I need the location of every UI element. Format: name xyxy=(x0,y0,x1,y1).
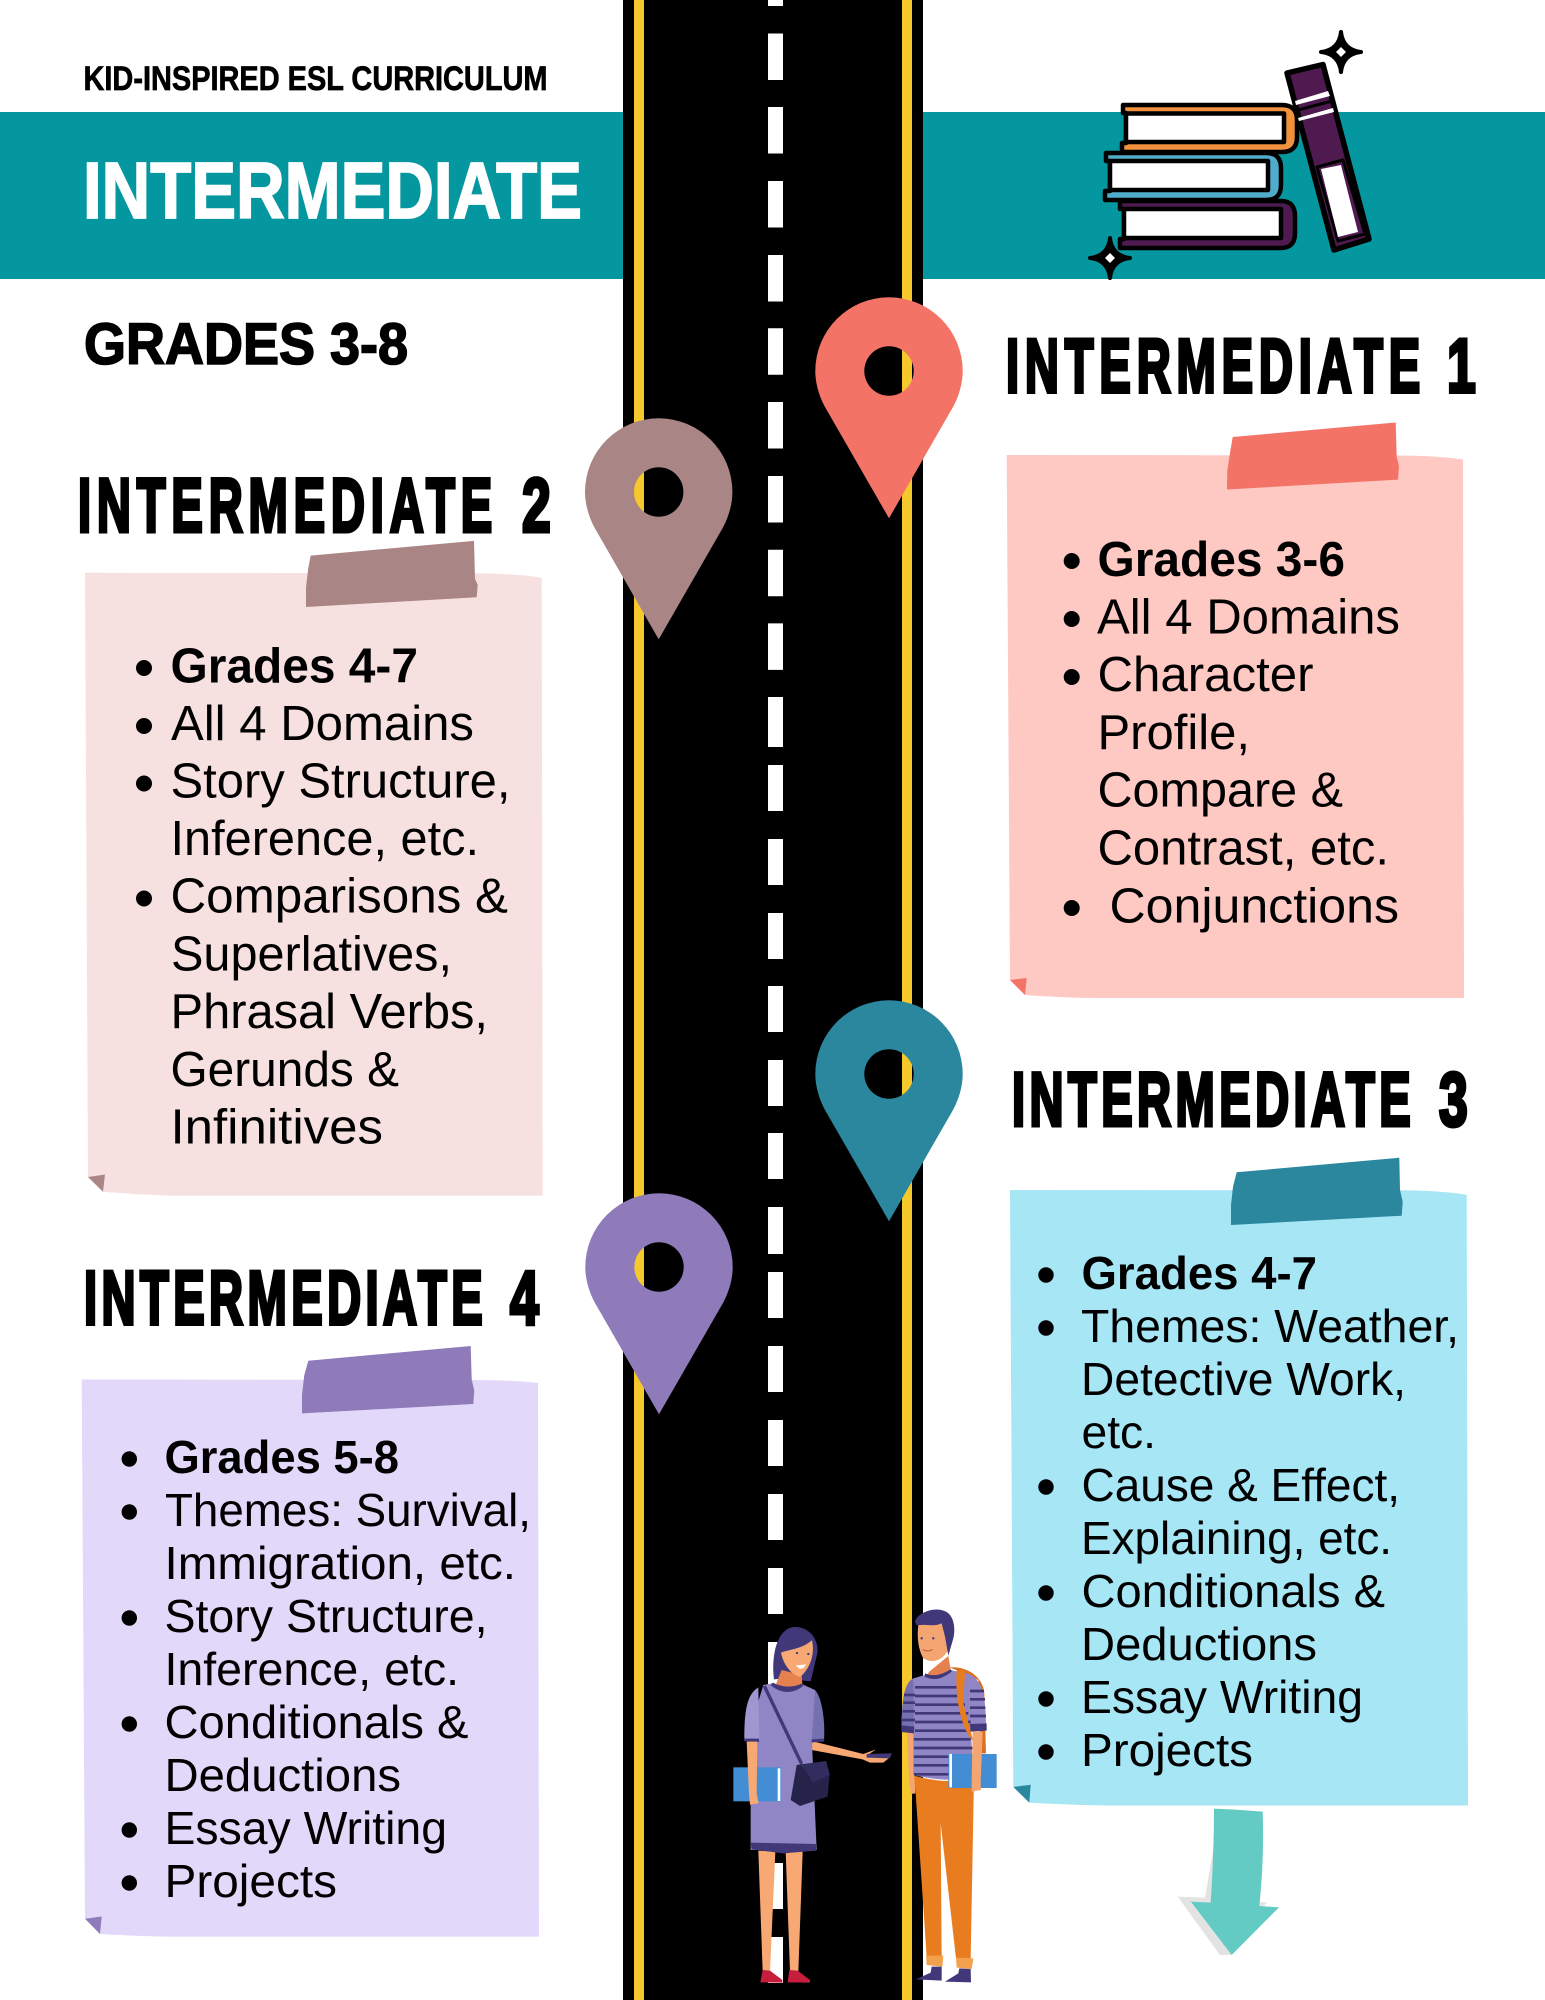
eyes and smile xyxy=(920,1637,923,1639)
arm left xyxy=(747,1742,759,1805)
book xyxy=(733,1767,781,1801)
bullet list: Essay Writing xyxy=(164,1802,447,1854)
arm right with phone xyxy=(812,1741,891,1763)
bullet list: Cause & Effect, xyxy=(1082,1459,1400,1511)
bullet list: Essay Writing xyxy=(1081,1671,1363,1723)
icon: leaning book xyxy=(1287,64,1369,250)
icon: sparkle bottom xyxy=(1090,238,1130,278)
trousers xyxy=(914,1775,974,1958)
heading: Intermediate 1: 1 xyxy=(1447,323,1476,408)
backpack strap back xyxy=(950,1667,986,1753)
bullet list: Grades 4-7 xyxy=(170,638,418,693)
bullet list: Story Structure, xyxy=(170,754,510,809)
road xyxy=(623,0,923,2000)
book xyxy=(948,1754,997,1788)
arm left xyxy=(907,1733,915,1794)
illustration: man with book xyxy=(901,1609,997,1982)
shoes xyxy=(760,1970,810,1983)
face xyxy=(781,1639,813,1677)
hair xyxy=(915,1609,954,1656)
fringe xyxy=(780,1633,813,1653)
face xyxy=(918,1623,948,1661)
trouser cuffs xyxy=(926,1956,973,1969)
bullet list: Conditionals & xyxy=(1082,1565,1385,1617)
dress xyxy=(747,1683,817,1850)
panel: Intermediate 2 note xyxy=(85,541,543,1196)
arm right xyxy=(972,1732,983,1792)
tape xyxy=(1231,1158,1403,1225)
icon: purple book xyxy=(1120,201,1295,248)
section: Intermediate 3 xyxy=(1010,1057,1468,1806)
bullet list: Grades 3-6 xyxy=(1098,532,1345,587)
bullet list xyxy=(1064,532,1400,934)
bullet list: Comparisons & xyxy=(170,869,508,924)
bullet list: Themes: Survival, xyxy=(165,1484,531,1536)
bullet list: Conditionals & xyxy=(164,1696,468,1748)
bullet list: Detective Work, xyxy=(1081,1353,1406,1405)
bullet list: All 4 Domains xyxy=(171,696,474,751)
bullet list: Conjunctions xyxy=(1110,878,1399,934)
page fold xyxy=(88,1174,105,1192)
icon: sparkle top xyxy=(1321,32,1361,72)
panel: Intermediate 3 note xyxy=(1010,1158,1468,1806)
bag strap xyxy=(764,1686,802,1764)
title: INTERMEDIATE xyxy=(83,146,582,235)
bag xyxy=(791,1761,829,1806)
icon: stack of books xyxy=(1105,64,1369,250)
section: Intermediate 2 xyxy=(78,463,551,1196)
heading: Intermediate 1: INTERMEDIATE xyxy=(1006,325,1420,409)
section: Intermediate 1 xyxy=(1006,323,1476,998)
heading: Intermediate 2: INTERMEDIATE xyxy=(78,464,492,548)
bullet list: Profile, xyxy=(1098,705,1250,760)
section: Intermediate 4 xyxy=(82,1255,539,1937)
pin: Intermediate 3 xyxy=(815,1000,963,1221)
bullet list: Infinitives xyxy=(170,1100,383,1154)
bullet list xyxy=(1038,1247,1459,1776)
bullet list xyxy=(136,638,510,1154)
kicker: curriculum name: KID-INSPIRED ESL CURRICULUM xyxy=(84,60,548,98)
smile and eyes xyxy=(796,1664,806,1669)
heading: Intermediate 4: 4 xyxy=(510,1255,539,1340)
pin: Intermediate 2 xyxy=(585,418,732,639)
panel: Intermediate 1 note xyxy=(1007,422,1464,998)
stripes xyxy=(902,1687,986,1774)
legs xyxy=(758,1851,803,1972)
bullet list: Story Structure, xyxy=(164,1590,488,1642)
bullet list: Character xyxy=(1098,647,1314,702)
bullet list: Inference, etc. xyxy=(164,1643,459,1695)
bullet list: Projects xyxy=(164,1855,337,1907)
bullet list: Compare & xyxy=(1098,762,1343,818)
pin: Intermediate 1 xyxy=(815,297,963,518)
subtitle: grades: GRADES 3-8 xyxy=(84,312,408,377)
heading: Intermediate 2: 2 xyxy=(522,463,551,548)
hair back xyxy=(773,1627,818,1681)
panel: Intermediate 4 note xyxy=(82,1346,539,1937)
neck xyxy=(775,1670,803,1688)
page fold xyxy=(1013,1785,1031,1803)
shoes xyxy=(916,1967,971,1982)
arrow: continue downward xyxy=(1178,1809,1279,1955)
heading: Intermediate 3: 3 xyxy=(1439,1057,1468,1142)
heading: Intermediate 4: INTERMEDIATE xyxy=(84,1257,483,1341)
illustration: woman with book xyxy=(733,1627,892,1983)
tape xyxy=(1227,422,1399,490)
bullet list: Themes: Weather, xyxy=(1081,1300,1459,1352)
bullet list: Inference, etc. xyxy=(170,811,479,866)
bullet list xyxy=(122,1431,531,1907)
bullet list: Gerunds & xyxy=(170,1042,399,1097)
striped shirt xyxy=(902,1670,986,1780)
bullet list: Phrasal Verbs, xyxy=(170,984,488,1039)
bullet list: Contrast, etc. xyxy=(1098,820,1389,876)
heading: Intermediate 3: INTERMEDIATE xyxy=(1012,1058,1411,1142)
page fold xyxy=(85,1916,102,1934)
bullet list: etc. xyxy=(1082,1406,1156,1458)
bullet list: Superlatives, xyxy=(171,927,452,982)
ear xyxy=(944,1637,952,1645)
bullet list: Grades 5-8 xyxy=(164,1431,399,1483)
bullet list: Immigration, etc. xyxy=(164,1537,516,1589)
icon: blue book xyxy=(1105,153,1281,200)
neck xyxy=(927,1656,951,1679)
bullet list: Deductions xyxy=(164,1749,401,1801)
pin: Intermediate 4 xyxy=(585,1193,733,1414)
bullet list: Grades 4-7 xyxy=(1082,1247,1317,1299)
icon: orange book xyxy=(1122,105,1297,152)
bullet list: Deductions xyxy=(1081,1618,1317,1670)
page fold xyxy=(1010,978,1027,995)
tape xyxy=(302,1346,474,1413)
bullet list: All 4 Domains xyxy=(1097,590,1400,645)
tape xyxy=(306,541,478,607)
backpack strap front xyxy=(956,1670,973,1742)
bullet list: Projects xyxy=(1081,1724,1253,1776)
bullet list: Explaining, etc. xyxy=(1081,1512,1392,1564)
teal header band xyxy=(0,112,1545,279)
